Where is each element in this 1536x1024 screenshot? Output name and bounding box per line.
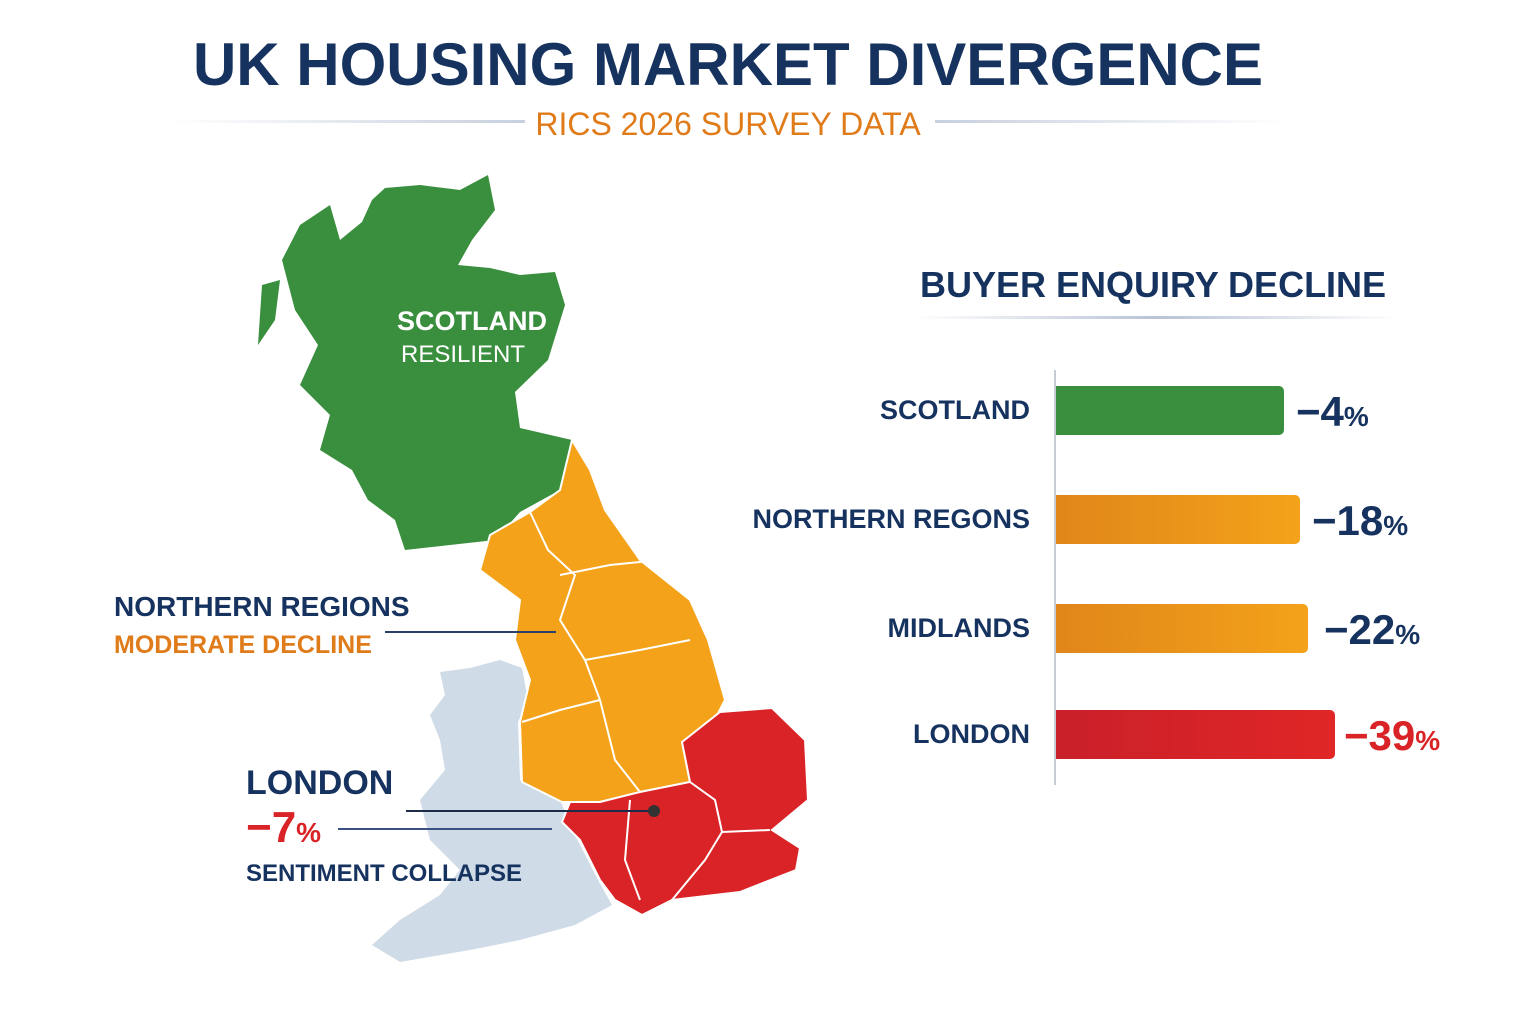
- label: scotland: SCOTLAND: [397, 306, 547, 336]
- title: UK HOUSING MARKET DIVERGENCE: [193, 31, 1263, 98]
- label: london: [246, 764, 522, 887]
- region: northern: [480, 440, 725, 802]
- bar: northern: −18%: [1312, 497, 1408, 544]
- bar: northern: [752, 495, 1408, 544]
- bar: london: [913, 710, 1440, 759]
- bar: northern: NORTHERN REGONS: [752, 504, 1030, 534]
- region: south/london: [562, 708, 808, 915]
- bar: london: −39%: [1344, 712, 1440, 759]
- label: london: SENTIMENT COLLAPSE: [246, 860, 522, 887]
- bar: midlands: MIDLANDS: [888, 613, 1030, 643]
- subtitle: RICS 2026 SURVEY DATA: [535, 106, 921, 142]
- leader lines: [338, 632, 660, 829]
- bar: midlands: −22%: [1324, 606, 1420, 653]
- map: [258, 175, 807, 962]
- region: wales/west: [372, 660, 612, 962]
- bar: scotland: −4%: [1296, 388, 1369, 435]
- label: london: −7%: [246, 803, 321, 852]
- bar: midlands: [888, 604, 1420, 653]
- region: scotland: [258, 175, 572, 550]
- label: northern regions: [114, 591, 410, 659]
- bar chart: [752, 370, 1440, 785]
- label: london: LONDON: [246, 764, 393, 802]
- bar: scotland: [880, 386, 1369, 435]
- bar: scotland: SCOTLAND: [880, 395, 1030, 425]
- label: northern regions: NORTHERN REGIONS: [114, 591, 410, 622]
- bar: london: LONDON: [913, 719, 1030, 749]
- label: scotland: RESILIENT: [401, 341, 525, 368]
- chart heading: BUYER ENQUIRY DECLINE: [920, 264, 1386, 305]
- label: scotland: [397, 306, 547, 368]
- label: northern regions: MODERATE DECLINE: [114, 631, 372, 659]
